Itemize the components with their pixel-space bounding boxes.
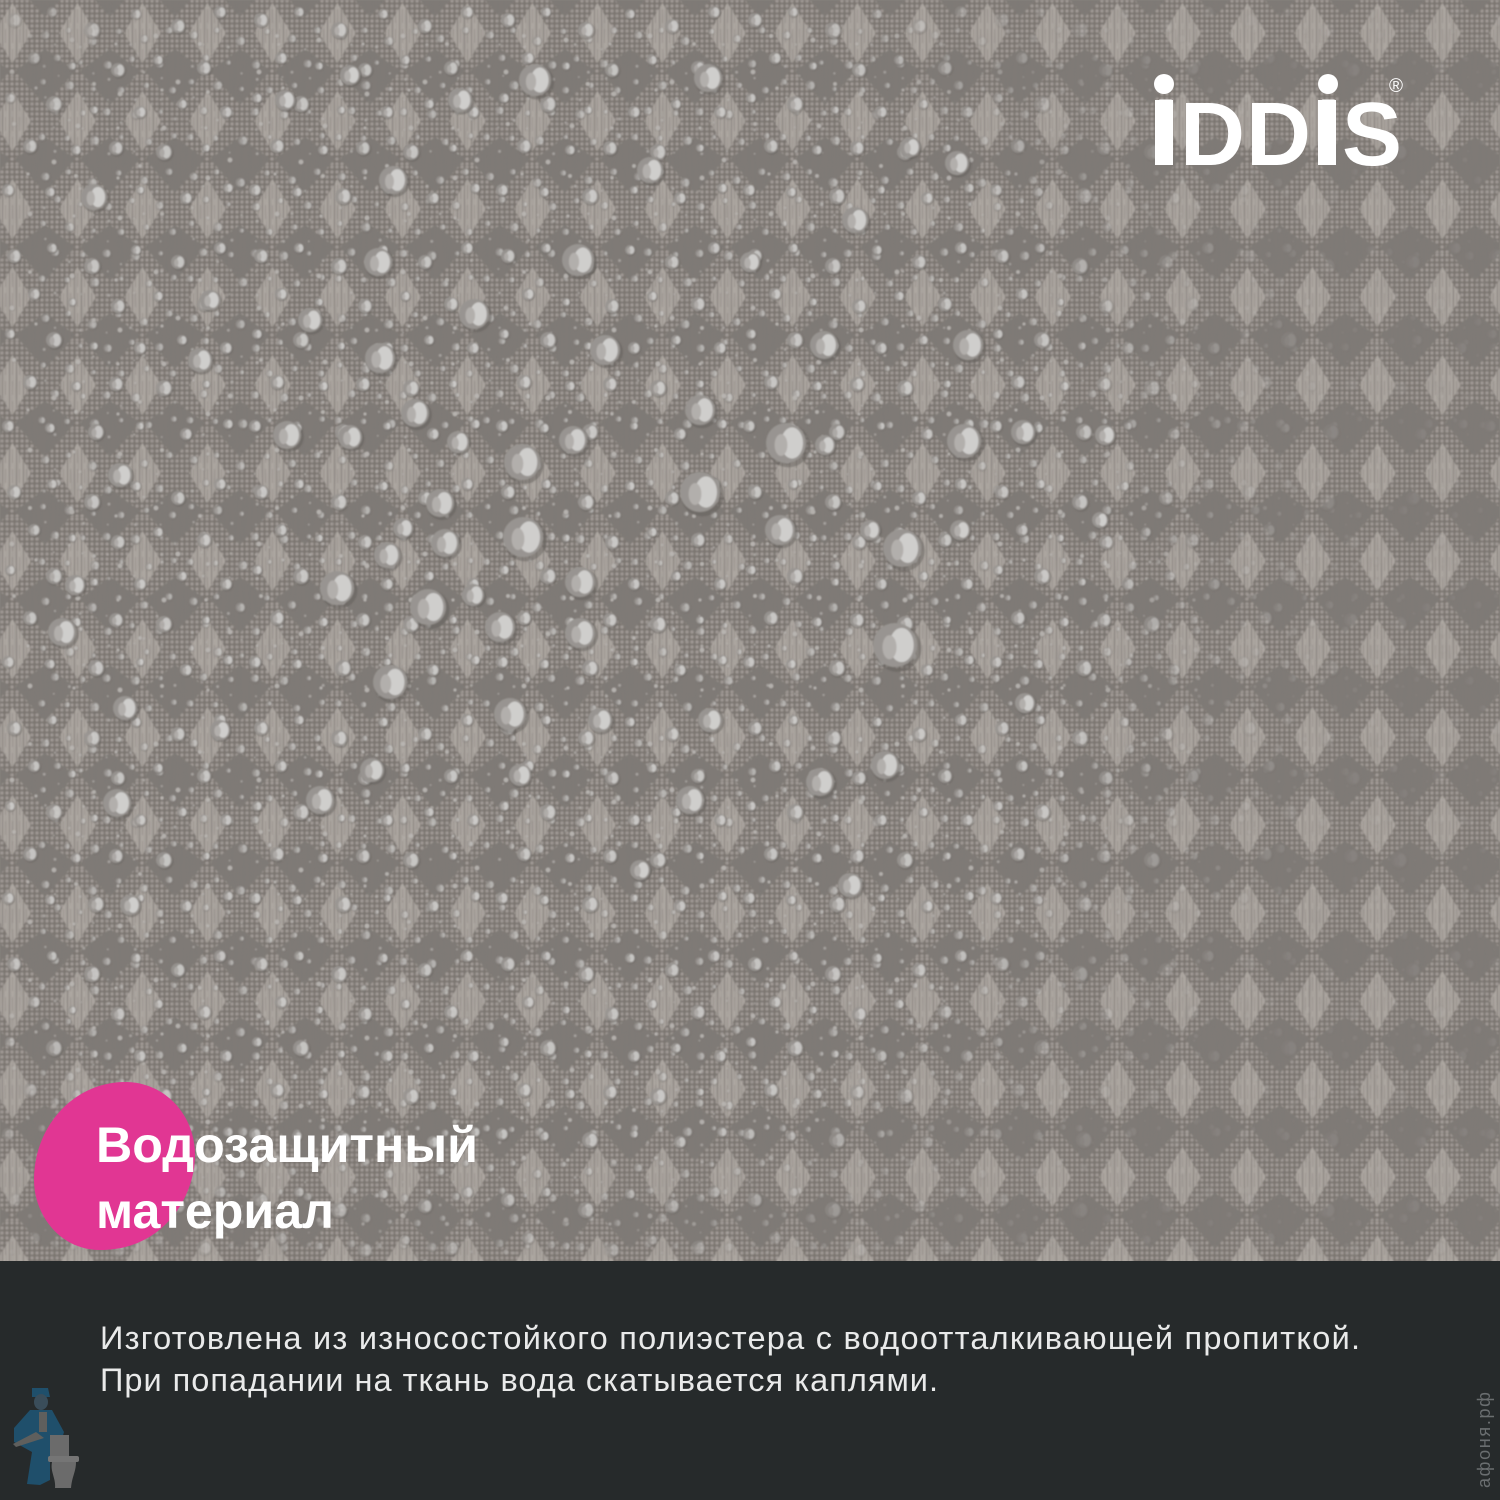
watermark: site name: афоня.рф: [1474, 1392, 1494, 1488]
pink blob accent: [34, 1082, 195, 1250]
logo: IDDIS: iDDiS: [1153, 85, 1402, 185]
logo: IDDIS: ®: [1389, 76, 1403, 97]
dark text band: [0, 1261, 1500, 1500]
icon: plumber with toilet watermark: [13, 1388, 79, 1488]
description text: При попадании на ткань вода скатывается каплями.: [100, 1362, 938, 1398]
description text: Изготовлена из износостойкого полиэстера с водоотталкивающей пропиткой.: [100, 1320, 1360, 1356]
heading: water-repellent material: Водозащитный: [96, 1117, 478, 1173]
heading: water-repellent material: [96, 1117, 478, 1239]
description text: [100, 1320, 1360, 1398]
heading: water-repellent material: материал: [96, 1183, 334, 1239]
